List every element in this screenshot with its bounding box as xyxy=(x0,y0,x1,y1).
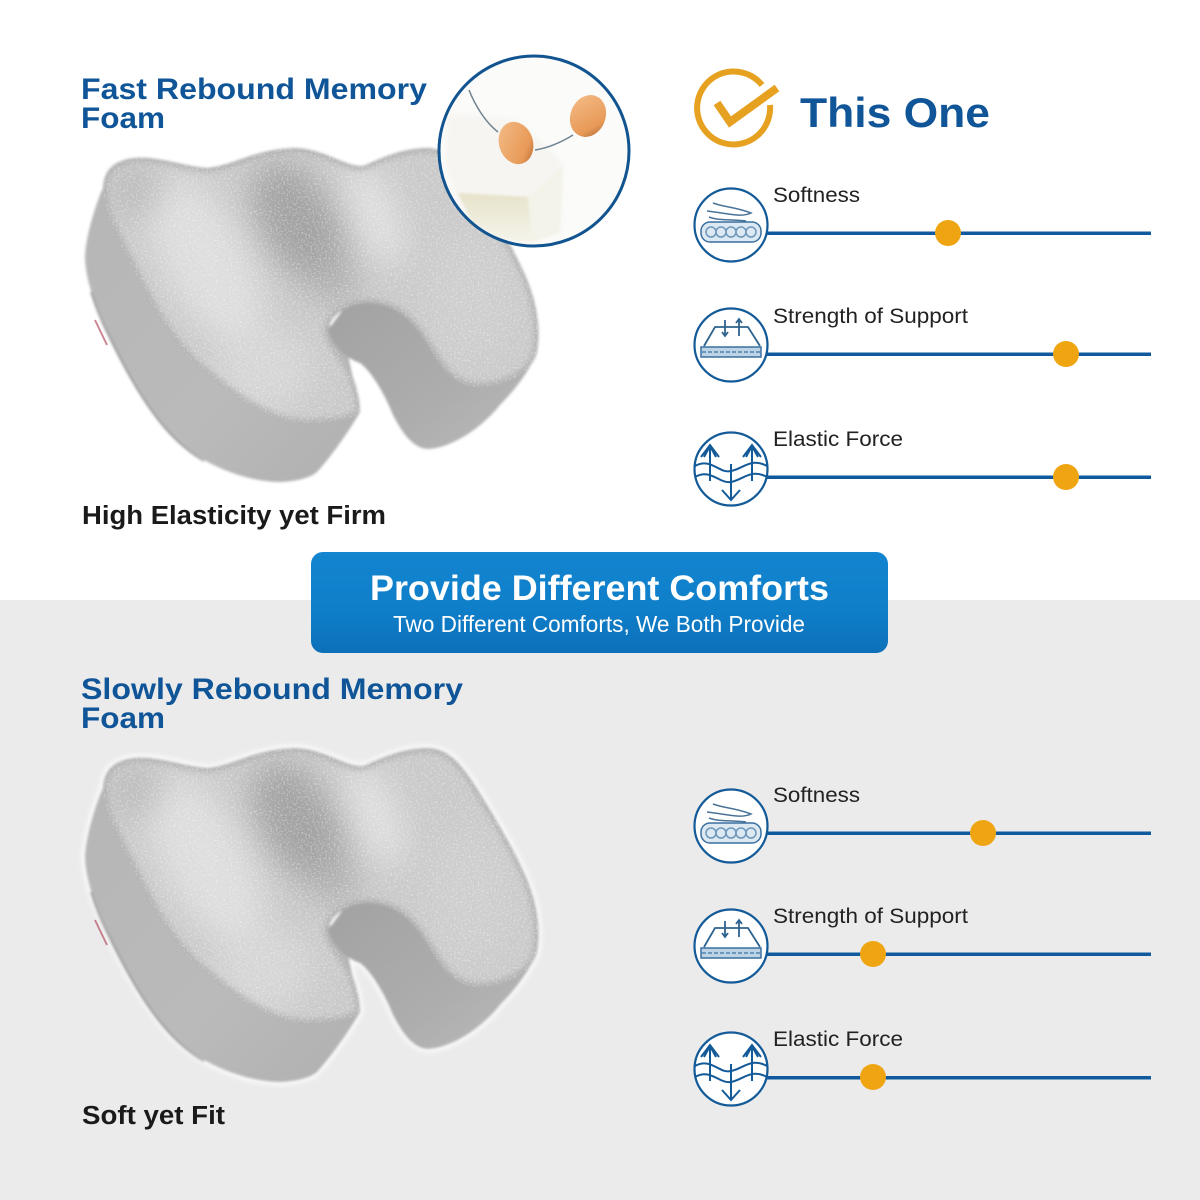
softness label: Softness xyxy=(773,784,860,807)
heading: fast rebound memory foam: Foam xyxy=(81,102,165,135)
support slider track xyxy=(766,952,1151,956)
rating: softness xyxy=(694,184,1151,262)
rating: strength of support xyxy=(694,305,1151,382)
rating: elastic force xyxy=(694,1028,1151,1106)
rating: strength of support xyxy=(694,905,1151,982)
softness icon xyxy=(694,790,768,862)
support label: Strength of Support xyxy=(773,305,968,328)
support icon xyxy=(694,308,768,382)
softness icon xyxy=(694,188,768,262)
panel: slowly rebound foam xyxy=(80,673,560,1130)
softness marker xyxy=(970,820,996,846)
heading: fast rebound memory foam xyxy=(81,73,427,135)
heading: slowly rebound memory foam xyxy=(81,673,463,735)
banner title: Provide Different Comforts xyxy=(370,569,829,608)
elastic marker xyxy=(860,1064,886,1090)
support label: Strength of Support xyxy=(773,905,968,928)
elastic label: Elastic Force xyxy=(773,428,903,451)
heading: this one: This One xyxy=(800,89,990,136)
panel: this one ratings xyxy=(694,71,1151,505)
cushion image bottom xyxy=(80,730,560,1082)
support slider track xyxy=(766,352,1151,356)
cushion image top xyxy=(80,130,560,482)
lower section background xyxy=(0,600,1200,1200)
softness marker xyxy=(935,220,961,246)
softness slider track xyxy=(766,232,1151,235)
panel: slow foam ratings xyxy=(694,784,1151,1106)
icon: orange check badge xyxy=(697,71,777,144)
circle inset: eggs on memory foam xyxy=(439,56,629,246)
elastic icon xyxy=(694,432,768,506)
softness slider track xyxy=(766,832,1151,835)
rating: elastic force xyxy=(694,428,1151,506)
heading: slowly rebound memory foam: Foam xyxy=(81,702,165,735)
support marker xyxy=(1053,341,1079,367)
banner subtitle: Two Different Comforts, We Both Provide xyxy=(393,611,805,637)
elastic label: Elastic Force xyxy=(773,1028,903,1051)
page background white xyxy=(0,0,1200,600)
caption: high elasticity yet firm: High Elasticity yet Firm xyxy=(82,502,386,530)
heading: slowly rebound memory foam: Slowly Rebound Memory xyxy=(81,673,463,706)
panel: fast rebound foam xyxy=(80,56,629,530)
support icon xyxy=(694,910,768,982)
support marker xyxy=(860,941,886,967)
elastic icon xyxy=(694,1032,768,1106)
elastic marker xyxy=(1053,464,1079,490)
elastic slider track xyxy=(766,476,1151,479)
softness label: Softness xyxy=(773,184,860,207)
rating: softness xyxy=(694,784,1151,862)
caption: soft yet fit: Soft yet Fit xyxy=(82,1102,226,1130)
elastic slider track xyxy=(766,1076,1151,1080)
banner: provide different comforts xyxy=(311,552,888,653)
heading: fast rebound memory foam: Fast Rebound Memory xyxy=(81,73,427,106)
